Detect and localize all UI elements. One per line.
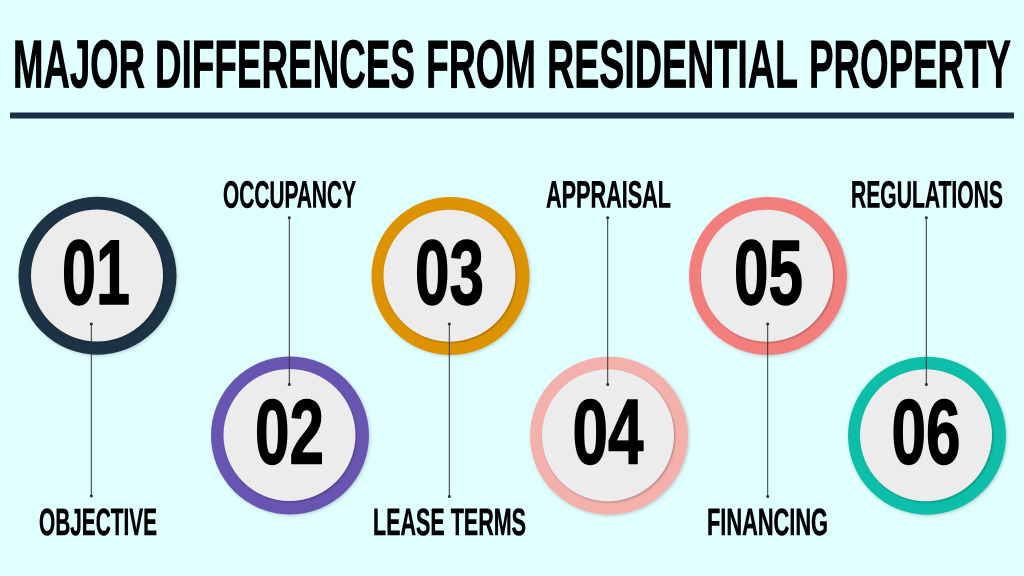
item 06: regulations — [848, 174, 1006, 515]
number 02: 02 — [255, 382, 324, 484]
title: DIFFERENCES — [155, 26, 415, 102]
ring 01 — [18, 197, 176, 355]
ring 06 — [848, 357, 1006, 515]
label: appraisal: APPRAISAL — [546, 174, 671, 216]
number 04: 04 — [572, 382, 644, 484]
title: RESIDENTIAL — [547, 26, 798, 102]
number 06: 06 — [892, 382, 960, 484]
title — [13, 26, 1011, 102]
label: financing: FINANCING — [707, 502, 828, 544]
connector 01 — [90, 322, 93, 498]
number 01: 01 — [62, 222, 130, 324]
ring 04 — [530, 357, 688, 515]
label: objective: OBJECTIVE — [39, 502, 157, 544]
label: occupancy: OCCUPANCY — [223, 174, 356, 216]
title underline — [10, 112, 1014, 118]
item 03: lease terms — [372, 197, 530, 544]
connector 04 — [606, 216, 609, 386]
label: lease terms: LEASE TERMS — [373, 502, 526, 544]
item 02: occupancy — [211, 174, 369, 514]
connector 03 — [448, 322, 451, 498]
number 05: 05 — [734, 222, 803, 324]
connector 06 — [925, 216, 928, 386]
ring 02 — [211, 356, 369, 514]
number 03: 03 — [415, 222, 484, 324]
title: MAJOR — [13, 26, 145, 102]
connector 02 — [288, 216, 291, 386]
item 04: appraisal — [530, 174, 688, 515]
item 01: objective — [18, 197, 176, 544]
item 05: financing — [689, 197, 847, 544]
connector 05 — [766, 322, 769, 498]
ring 03 — [372, 197, 530, 355]
ring 05 — [689, 197, 847, 355]
title: FROM — [426, 26, 536, 102]
